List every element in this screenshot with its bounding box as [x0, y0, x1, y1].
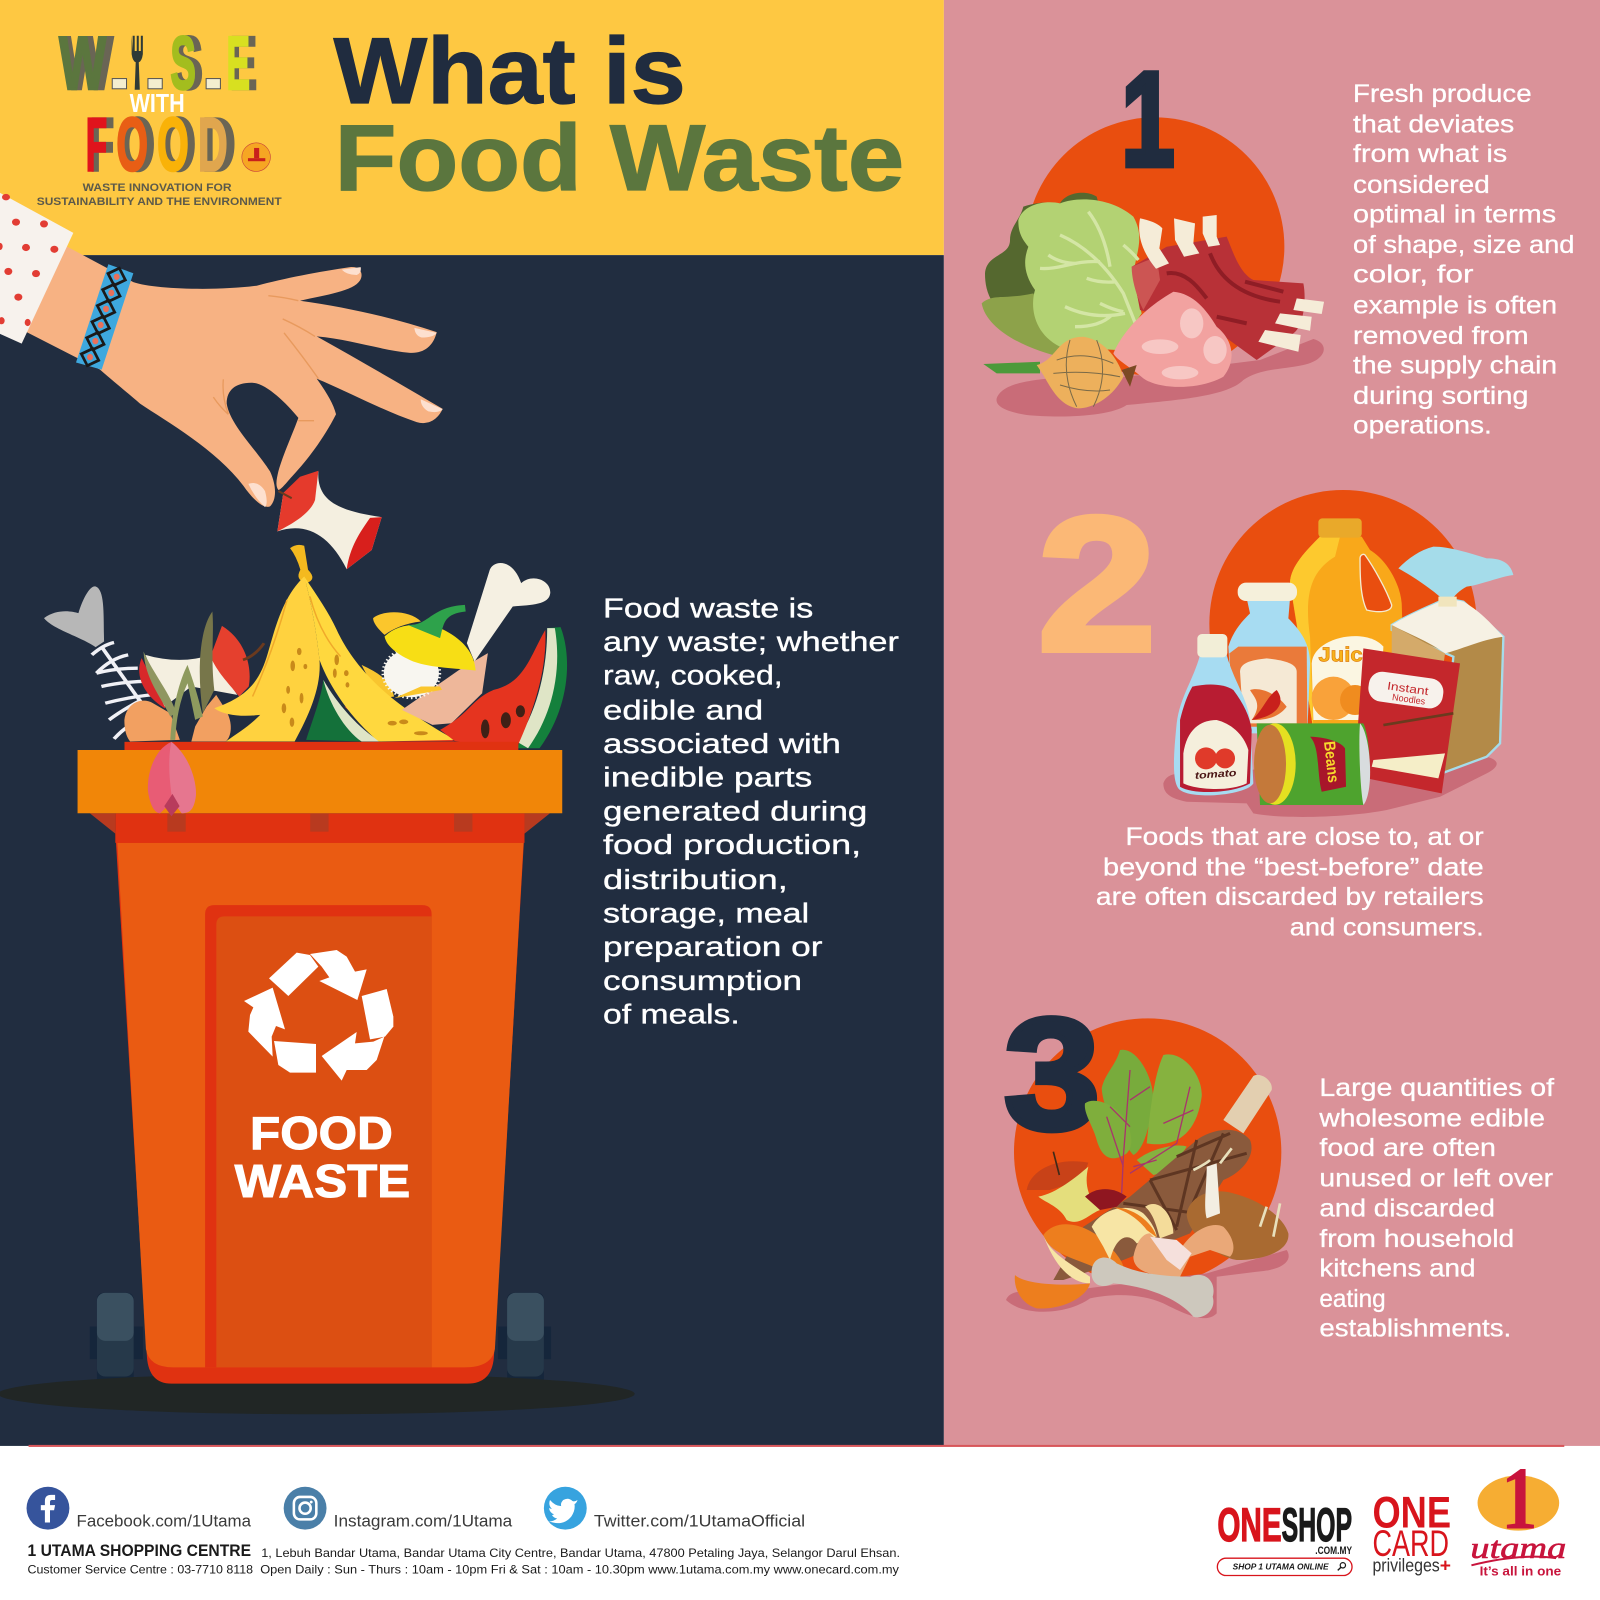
text block: item 2 — [1096, 823, 1484, 942]
logo letter faces — [59, 22, 250, 187]
definition text block: food production, — [603, 829, 861, 860]
illustration: hand dropping apple core — [0, 193, 443, 569]
text block: item 1: optimal in terms — [1353, 200, 1556, 228]
logo: OneShop: SHOP 1 UTAMA ONLINE — [1233, 1562, 1329, 1571]
logo: W.I.S.E with Food: E — [227, 22, 250, 106]
text block: item 2: are often discarded by retailers — [1096, 883, 1484, 911]
logo: OneCard privileges: CARD — [1372, 1523, 1449, 1564]
text block: item 3: Large quantities of — [1319, 1074, 1554, 1102]
bone — [467, 563, 550, 662]
logo: OneShop — [1217, 1499, 1352, 1576]
footer: social links: Facebook.com/1Utama — [77, 1513, 252, 1531]
illustration 1: fresh produce — [982, 117, 1324, 417]
meat scrap — [402, 653, 488, 725]
bin label text — [235, 1107, 410, 1207]
title: Food Waste — [335, 105, 904, 210]
logo letter shadows: W — [62, 22, 114, 106]
logo letter shadows: F — [90, 103, 114, 187]
text block: item 1: removed from — [1353, 322, 1529, 350]
logo: OneCard privileges: ONE — [1372, 1487, 1451, 1538]
orange peel — [1015, 1204, 1173, 1309]
text block: item 1: of shape, size and — [1353, 231, 1574, 259]
definition text block: associated with — [603, 728, 841, 759]
definition text block — [603, 592, 899, 1029]
definition text block: preparation or — [603, 931, 822, 962]
text block: item 1: example is often — [1353, 291, 1557, 319]
icon: twitter — [544, 1487, 587, 1530]
potato with sprouts — [1187, 1148, 1288, 1260]
instant noodles pack: Instant — [1386, 680, 1430, 698]
icon: facebook — [27, 1487, 69, 1530]
logo letter faces: D — [198, 103, 228, 187]
numeral 1: 1 — [1121, 45, 1174, 194]
definition text block: generated during — [603, 795, 867, 826]
logo: OneShop: ONE — [1217, 1499, 1282, 1551]
knuckle lines and nails — [213, 267, 443, 507]
small square dots — [112, 79, 220, 89]
shadow — [1006, 1250, 1289, 1318]
text block: item 1: Fresh produce — [1353, 80, 1532, 108]
logo: OneCard privileges: privileges — [1372, 1554, 1440, 1575]
pink meat cut — [1113, 292, 1232, 387]
wilted tulip — [148, 742, 196, 816]
text block: item 3: establishments. — [1319, 1315, 1511, 1343]
logo letter faces: F — [86, 103, 107, 187]
logo: 1 Utama: 1 — [1501, 1450, 1538, 1549]
icon: recycling arrows — [244, 950, 393, 1081]
footer: address and contact: Customer Service Centre : 03-7710 8118 — [28, 1562, 253, 1576]
footer: social links: Instagram.com/1Utama — [334, 1513, 513, 1531]
small 1 Utama badge — [242, 143, 270, 171]
text block: item 3: and discarded — [1319, 1194, 1495, 1222]
text block: item 1: color, for — [1353, 261, 1473, 289]
sleeve — [0, 193, 73, 344]
orange circle — [1026, 117, 1284, 376]
watermelon wedge — [440, 627, 567, 748]
text block: item 3: unused or left over — [1319, 1165, 1553, 1193]
icon: instagram — [284, 1487, 327, 1530]
text block: item 2: beyond the “best-before” date — [1103, 854, 1484, 882]
text block: item 3: eating — [1319, 1285, 1386, 1313]
apple core — [139, 626, 264, 708]
title — [334, 18, 904, 210]
logo: W.I.S.E with Food: WITH — [130, 90, 185, 118]
shadow — [997, 339, 1324, 417]
logo: OneShop: SHOP — [1282, 1499, 1352, 1551]
text block: item 1: considered — [1353, 171, 1490, 199]
rice ball — [384, 649, 439, 697]
logo letter shadows: O — [161, 103, 196, 187]
bread bag — [1392, 547, 1513, 773]
logo: 1 Utama: utama — [1470, 1531, 1566, 1565]
definition text block: raw, cooked, — [603, 660, 783, 691]
definition text block: inedible parts — [603, 762, 812, 793]
text block: item 1: the supply chain — [1353, 351, 1557, 379]
footer: address and contact: 1 UTAMA SHOPPING CENTRE — [28, 1542, 251, 1560]
instant noodles pack: Noodles — [1391, 692, 1426, 707]
falling apple core — [277, 471, 382, 569]
definition text block: consumption — [603, 965, 802, 996]
fish skeleton — [44, 586, 161, 739]
footer: social links: Twitter.com/1UtamaOfficial — [594, 1513, 805, 1531]
tomato sauce bottle — [1174, 634, 1253, 795]
definition text block: of meals. — [603, 998, 740, 1029]
logo: W.I.S.E with Food: SUSTAINABILITY AND THE ENVIRONMENT — [37, 196, 282, 208]
definition text block: Food waste is — [603, 592, 813, 623]
text block: item 3: wholesome edible — [1318, 1105, 1545, 1133]
orange circle — [1209, 490, 1477, 757]
bin label text: FOOD — [250, 1107, 393, 1159]
logo letter shadows: O — [120, 103, 155, 187]
chard leaves — [1085, 1050, 1202, 1193]
juice jug: Juice — [1318, 644, 1375, 667]
logo: 1 Utama: It’s all in one — [1480, 1564, 1561, 1579]
logo letter faces: O — [157, 103, 189, 187]
text block: item 3 — [1318, 1074, 1554, 1343]
definition text block: edible and — [603, 694, 763, 725]
bin lid — [78, 742, 562, 813]
hot sauce bottle — [1228, 583, 1310, 733]
wheels — [90, 1293, 551, 1390]
footer: address and contact — [28, 1542, 900, 1576]
logo letter shadows: S — [173, 22, 203, 106]
definition text block: any waste; whether — [603, 626, 899, 657]
logo letter shadows: D — [202, 103, 236, 187]
logo: 1 Utama — [1470, 1450, 1566, 1579]
logo letter faces: O — [116, 103, 148, 187]
rack of ribs — [1132, 215, 1324, 360]
footer: address and contact: 1, Lebuh Bandar Utama, Bandar Utama City Centre, Bandar Utama, 47800 Petaling Jaya, Selangor Darul Ehsan. — [261, 1546, 900, 1560]
logo letter faces: S — [170, 22, 196, 106]
text block: item 3: from household — [1319, 1225, 1514, 1253]
bone — [1091, 1258, 1214, 1317]
numeral 2: 2 — [1038, 478, 1156, 691]
yellow pepper — [373, 605, 476, 698]
tomato sauce bottle: tomato — [1195, 768, 1237, 782]
watermelon slice under banana — [306, 680, 455, 742]
banana peel — [214, 545, 455, 742]
bin label text: WASTE — [235, 1155, 410, 1207]
wilted leaves — [143, 611, 214, 740]
logo: OneCard privileges: + — [1440, 1554, 1451, 1575]
illustration 3: household leftovers — [1006, 1050, 1289, 1318]
bin label panel — [205, 905, 432, 1367]
bracelet — [76, 264, 133, 370]
text block: item 1: operations. — [1353, 412, 1492, 440]
text block: item 1: during sorting — [1353, 382, 1529, 410]
lettuce — [982, 193, 1142, 358]
logo letter faces: W — [59, 22, 107, 106]
text block: item 1: that deviates — [1353, 111, 1514, 139]
grilled meat with bone — [1053, 1075, 1272, 1280]
numeral 3: 3 — [1004, 986, 1100, 1163]
text block: item 1: from what is — [1353, 140, 1507, 168]
logo letter shadows: E — [230, 22, 257, 106]
title: What is — [334, 18, 686, 123]
text block: item 1 — [1353, 80, 1574, 440]
instant noodles pack — [1350, 648, 1460, 793]
eggshells — [124, 695, 231, 742]
food waste bin — [0, 742, 635, 1414]
definition text block: storage, meal — [603, 897, 809, 928]
hand — [27, 246, 443, 507]
text block: item 3: kitchens and — [1319, 1255, 1476, 1283]
ground shadow — [0, 1373, 635, 1414]
bin body — [115, 832, 524, 1384]
logo: W.I.S.E with Food — [37, 22, 282, 208]
logo: OneShop: .COM.MY — [1315, 1545, 1352, 1557]
beans can: Beans — [1320, 740, 1341, 784]
definition text block: distribution, — [603, 864, 788, 895]
text block: item 2: Foods that are close to, at or — [1126, 823, 1484, 851]
onion — [983, 337, 1137, 408]
broken eggshell — [1133, 1225, 1233, 1277]
illustration 2: packaged goods — [1163, 490, 1513, 817]
apple core — [1027, 1152, 1127, 1222]
footer: address and contact: Open Daily : Sun - Thurs : 10am - 10pm Fri & Sat : 10am - 10.30pm www.1utama.com.my www.onecard.com.my — [260, 1562, 900, 1576]
text block: item 3: food are often — [1319, 1134, 1496, 1162]
bin rim — [115, 813, 524, 843]
logo: W.I.S.E with Food: WASTE INNOVATION FOR — [83, 182, 232, 194]
juice jug — [1290, 518, 1403, 730]
logo letter shadows — [62, 22, 257, 187]
illustration: food scraps — [44, 545, 567, 748]
beans can — [1254, 723, 1370, 805]
text block: item 2: and consumers. — [1290, 914, 1484, 942]
logo: OneCard privileges — [1372, 1487, 1451, 1575]
icon: fork — [132, 36, 143, 90]
banana peel behind — [362, 665, 394, 698]
illustration 3: orange circle — [1014, 1018, 1281, 1286]
footer: social links — [27, 1487, 805, 1531]
shadow — [1163, 757, 1497, 817]
